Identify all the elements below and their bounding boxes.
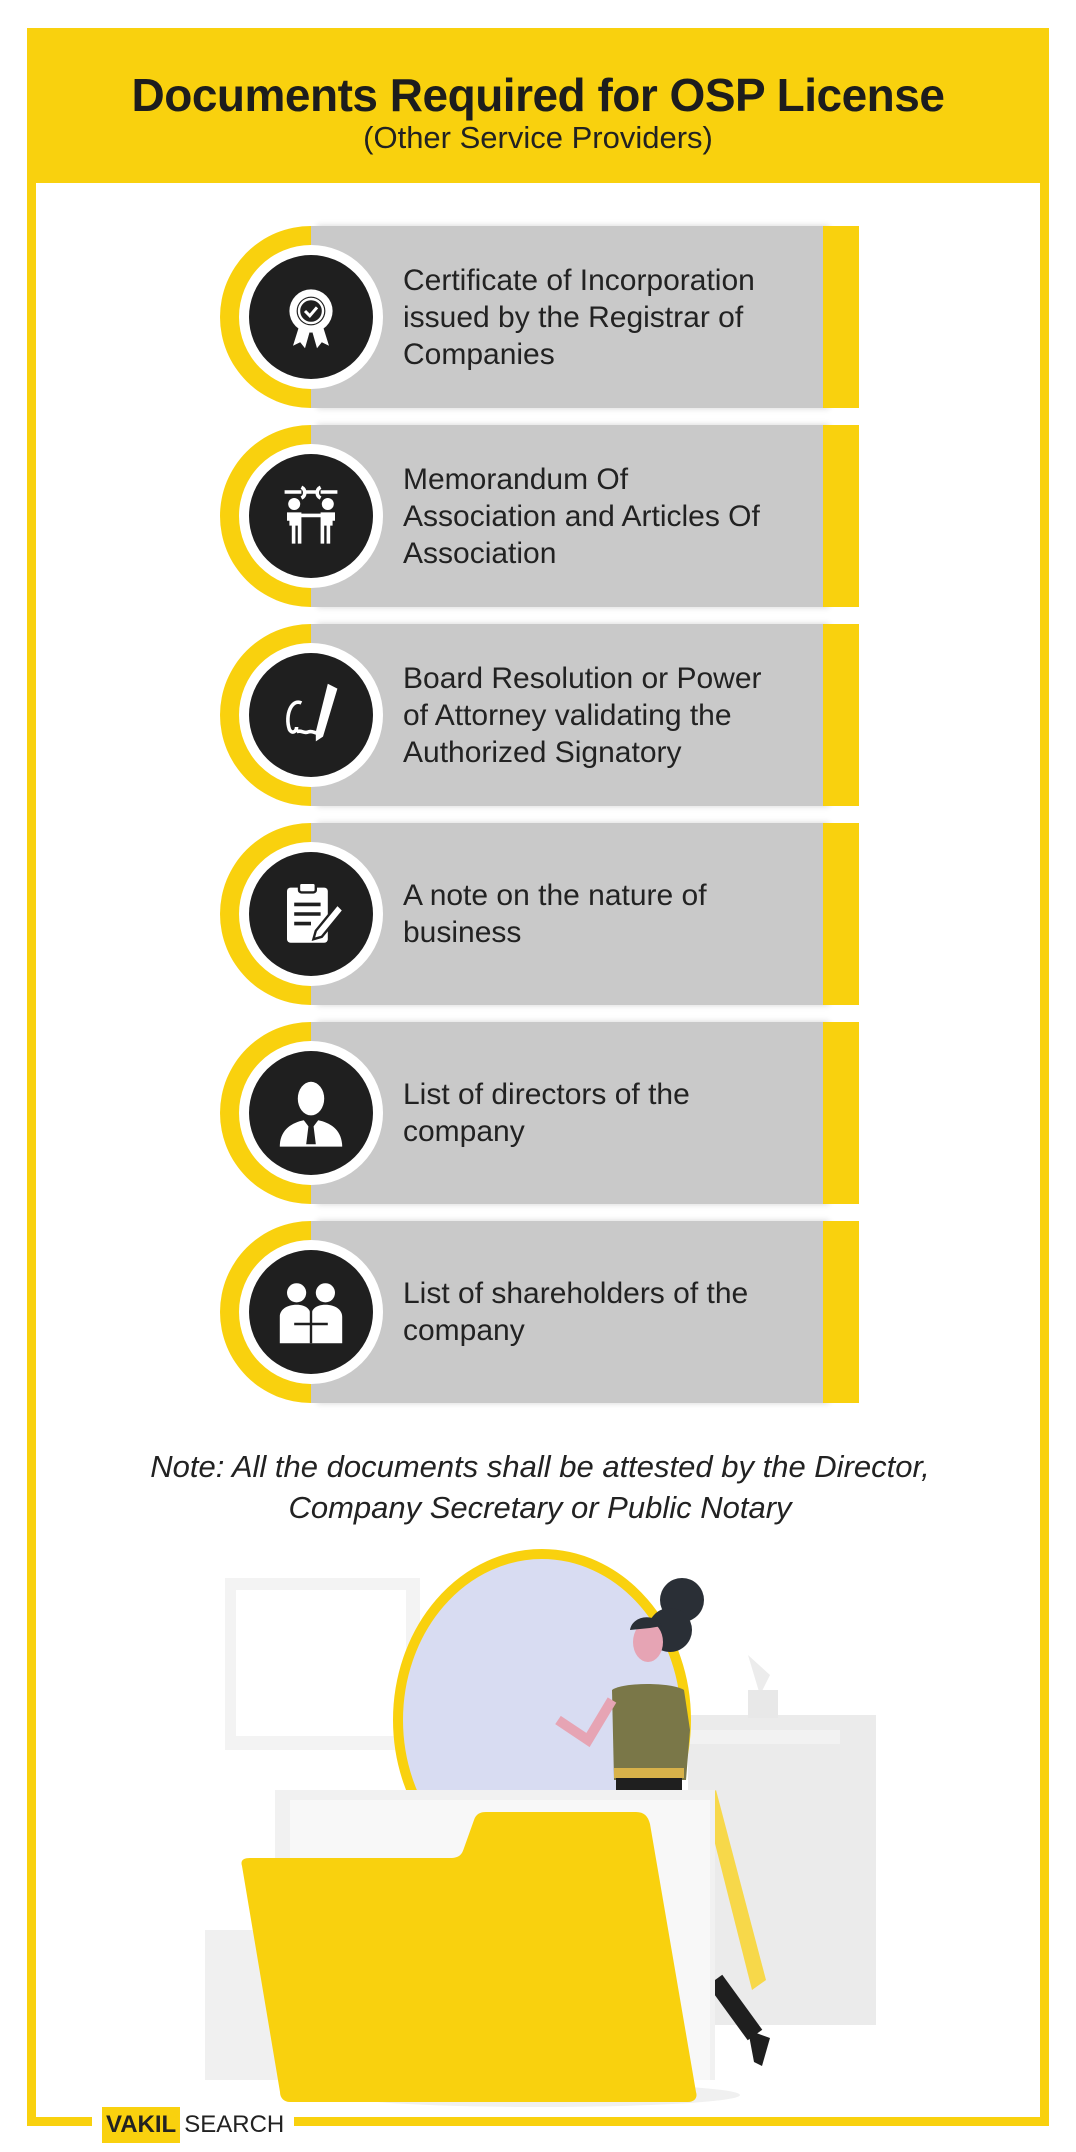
item 1: certificate <box>220 224 859 410</box>
illustration: woman with folder and mirror <box>205 1549 876 2107</box>
icon: award <box>249 255 373 379</box>
text: company <box>403 1314 525 1347</box>
text: Board Resolution or Power <box>403 662 762 694</box>
folder back and papers <box>704 1790 766 1990</box>
icon: two people <box>249 1250 373 1374</box>
item 3: board resolution <box>220 622 859 808</box>
logo: SEARCH <box>184 2111 284 2138</box>
shadow <box>340 2083 740 2107</box>
icon: person <box>249 1051 373 1175</box>
text: A note on the nature of <box>403 879 707 912</box>
item 6: shareholders <box>220 1218 859 1406</box>
text: of Attorney validating the <box>403 698 732 732</box>
text: company <box>403 1115 525 1148</box>
item 2: MoA <box>220 422 859 610</box>
text <box>403 879 707 949</box>
text: Companies <box>403 338 555 370</box>
woman <box>558 1578 770 2066</box>
text: Memorandum Of <box>403 462 628 496</box>
note text: Company Secretary or Public Notary <box>288 1490 792 1525</box>
icon: signature pen <box>249 653 373 777</box>
item 4: note <box>220 820 859 1008</box>
title: Documents Required for OSP License <box>132 69 944 121</box>
icon: handshake chain <box>249 454 373 578</box>
text <box>403 1277 748 1347</box>
text: issued by the Registrar of <box>403 300 743 334</box>
header band <box>27 28 1049 183</box>
text: List of directors of the <box>403 1078 690 1111</box>
text <box>403 462 760 570</box>
logo <box>92 2108 294 2142</box>
icon: clipboard <box>249 852 373 976</box>
text: Association <box>403 536 556 570</box>
text: Authorized Signatory <box>403 736 682 768</box>
text <box>403 662 762 768</box>
background furniture <box>205 1578 876 2080</box>
logo: VAKIL <box>106 2111 176 2138</box>
note text: Note: All the documents shall be attested by the Director, <box>150 1449 930 1484</box>
folder front <box>241 1812 697 2102</box>
mirror <box>398 1554 686 1886</box>
text: business <box>403 916 521 949</box>
text: Association and Articles Of <box>403 500 760 532</box>
item 5: directors <box>220 1020 859 1206</box>
text: Certificate of Incorporation <box>403 264 755 296</box>
text <box>403 264 755 370</box>
subtitle: (Other Service Providers) <box>363 120 713 155</box>
text <box>403 1078 690 1148</box>
note text <box>150 1449 930 1525</box>
text: List of shareholders of the <box>403 1277 748 1310</box>
